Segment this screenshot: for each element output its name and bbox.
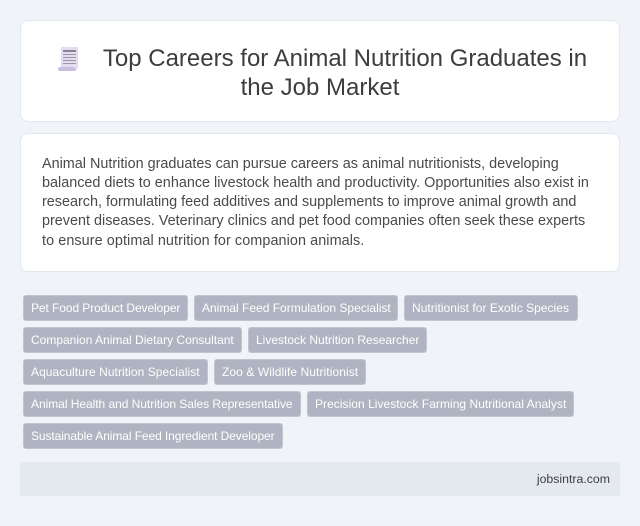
description text bbox=[42, 156, 589, 249]
tag bbox=[307, 391, 574, 417]
tag bbox=[23, 295, 188, 321]
tag bbox=[248, 327, 427, 353]
tag: Pet Food Product Developer bbox=[31, 301, 180, 315]
tag: Animal Feed Formulation Specialist bbox=[202, 301, 391, 315]
description text: to ensure optimal nutrition for companion animals. bbox=[42, 233, 364, 249]
tag bbox=[23, 327, 242, 353]
tag bbox=[194, 295, 398, 321]
title: Top Careers for Animal Nutrition Graduates in bbox=[103, 45, 587, 72]
tag: Zoo & Wildlife Nutritionist bbox=[222, 365, 358, 379]
description text: balanced diets to enhance livestock health and productivity. Opportunities also exist in bbox=[42, 175, 589, 191]
tag bbox=[404, 295, 578, 321]
tag bbox=[23, 423, 283, 449]
description text: research, formulating feed additives and supplements to improve animal growth and bbox=[42, 194, 576, 210]
tag: Nutritionist for Exotic Species bbox=[412, 301, 569, 315]
tag: Aquaculture Nutrition Specialist bbox=[31, 365, 200, 379]
tag: Livestock Nutrition Researcher bbox=[256, 333, 419, 347]
tag: Precision Livestock Farming Nutritional Analyst bbox=[315, 397, 566, 411]
tag: Companion Animal Dietary Consultant bbox=[31, 333, 234, 347]
tag: Sustainable Animal Feed Ingredient Developer bbox=[31, 429, 275, 443]
tag: Animal Health and Nutrition Sales Representative bbox=[31, 397, 293, 411]
description panel bbox=[20, 133, 620, 272]
header panel bbox=[20, 20, 620, 122]
footer bar bbox=[20, 462, 620, 496]
description text: prevent diseases. Veterinary clinics and pet food companies often seek these experts bbox=[42, 213, 585, 229]
description text: Animal Nutrition graduates can pursue careers as animal nutritionists, developing bbox=[42, 156, 559, 172]
footer source: jobsintra.com bbox=[537, 472, 610, 486]
tag bbox=[23, 359, 208, 385]
career tags bbox=[23, 295, 578, 449]
tag bbox=[214, 359, 366, 385]
tag bbox=[23, 391, 301, 417]
title bbox=[103, 45, 587, 101]
icon: document scroll bbox=[58, 47, 78, 71]
title: the Job Market bbox=[241, 74, 399, 101]
